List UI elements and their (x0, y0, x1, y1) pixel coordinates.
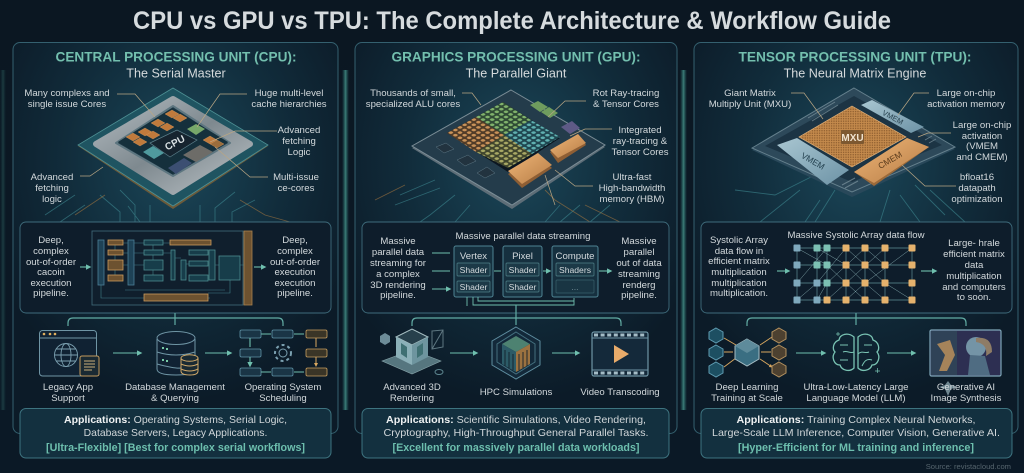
callout labels: memory (HBM) (599, 194, 665, 205)
source credit: Source: revistacloud.com (926, 462, 1011, 471)
callout labels: ray-tracing & (613, 136, 668, 147)
TPU chip illustration: MXU (841, 133, 864, 144)
shader stages: Shaders (559, 265, 591, 275)
callout labels: Huge multi-level (255, 88, 323, 99)
applications box: [Hyper-Efficient for ML training and inference] (738, 442, 974, 454)
icon: deep learning (709, 328, 786, 377)
pipeline right text (270, 235, 321, 299)
connector bracket (412, 305, 621, 326)
pipeline title: Massive parallel data streaming (456, 231, 590, 242)
shader stages: Shader (509, 282, 536, 292)
icon: database (157, 332, 198, 375)
icon labels: & Querying (151, 393, 199, 404)
pipeline right text (942, 238, 1006, 303)
pipeline left text: multiplication. (710, 288, 768, 299)
icon labels: Language Model (LLM) (806, 393, 906, 404)
callout labels: Giant Matrix (724, 88, 776, 99)
pipeline right text: execution (274, 278, 316, 289)
systolic array (794, 244, 916, 304)
callout labels: ce-cores (278, 183, 315, 194)
callout labels (709, 88, 1011, 205)
GPU subtitle: The Parallel Giant (466, 66, 567, 80)
circuit traces (45, 190, 290, 222)
pipeline left text: out-of-order (26, 257, 77, 268)
pipeline right text: to soon. (957, 292, 991, 303)
applications box (701, 408, 1012, 458)
callout labels: High-bandwidth (599, 183, 665, 194)
pipeline right text: Deep, (282, 235, 308, 246)
input arrows (432, 253, 450, 289)
callout labels: & Tensor Cores (593, 99, 659, 110)
applications box (362, 408, 669, 458)
shader stages: Shader (460, 282, 487, 292)
CPU pipeline panel (20, 222, 331, 313)
icon: 3D rendering (380, 329, 443, 374)
applications box: [Excellent for massively parallel data workloads] (392, 442, 640, 454)
icon labels: Legacy App (43, 382, 93, 393)
CPU chip illustration (78, 88, 268, 209)
pipeline left text: efficient matrix (708, 256, 770, 267)
icon labels: Scheduling (259, 393, 307, 404)
pipeline left text: parallel data (372, 247, 425, 258)
icon labels: Generative AI (937, 382, 995, 393)
callout labels: cache hierarchies (251, 99, 327, 110)
title: CPU vs GPU vs TPU: The Complete Architecture & Workflow Guide (133, 7, 891, 35)
pipeline left text: Systolic Array (710, 235, 768, 246)
callout labels: activation memory (927, 99, 1005, 110)
icon labels: HPC Simulations (480, 387, 552, 398)
arrow (552, 352, 579, 354)
shader stages: Vertex (460, 251, 487, 262)
callout labels: single issue Cores (28, 99, 106, 110)
CPU chip illustration: CPU (163, 134, 187, 153)
applications box (20, 408, 331, 458)
applications box: Applications: Training Complex Neural Networks, (736, 415, 976, 426)
callout labels: Multi-issue (273, 172, 319, 183)
callout labels: optimization (951, 194, 1003, 205)
applications box: [Ultra-Flexible] [Best for complex serial workflows] (46, 442, 305, 454)
connector bracket (747, 313, 966, 326)
callout labels: Tensor Cores (611, 147, 669, 158)
pipeline right text (616, 236, 662, 301)
icon labels: Ultra-Low-Latency Large (803, 382, 909, 393)
pipeline right text: pipeline. (277, 288, 313, 299)
GPU chip illustration (412, 90, 605, 209)
pipeline right text: pipeline. (621, 290, 657, 301)
callout labels (366, 88, 669, 205)
shader stages: Shader (460, 265, 487, 275)
icon labels: Database Management (125, 382, 225, 393)
callout labels: Advanced (31, 172, 73, 183)
callout labels: bfloat16 (960, 172, 994, 183)
TPU chip illustration (752, 88, 955, 197)
pipeline left text: Massive (380, 236, 416, 247)
TPU subtitle: The Neural Matrix Engine (784, 66, 926, 80)
pipeline right text: multiplication (946, 271, 1002, 282)
pipeline right text: efficient matrix (943, 249, 1005, 260)
callout labels: and CMEM) (956, 152, 1008, 163)
shader stages: ... (571, 282, 579, 292)
callout labels: datapath (958, 183, 996, 194)
panel: TPU (694, 42, 1018, 458)
array title: Massive Systolic Array data flow (787, 230, 925, 241)
icon: generative AI image (930, 330, 1001, 396)
pipeline right text: out-of-order (270, 257, 321, 268)
pipeline left text (26, 235, 77, 299)
pipeline right text: Massive (621, 236, 657, 247)
icon: video (592, 332, 648, 376)
pipeline right text: data (965, 260, 984, 271)
pipeline right text: Large- hrale (948, 238, 1000, 249)
arrow (921, 270, 936, 272)
callout labels: fetching (282, 136, 316, 147)
callout labels: Thousands of small, (370, 88, 456, 99)
icon labels: Deep Learning (716, 382, 778, 393)
pipeline diagram (92, 231, 252, 305)
TPU pipeline panel (701, 222, 1012, 313)
icon: HPC (492, 327, 540, 379)
pipeline right text: and computers (942, 282, 1006, 293)
pipeline left text: multiplication (711, 278, 767, 289)
GPU pipeline panel (362, 222, 669, 313)
arrow (113, 352, 141, 354)
arrow (777, 270, 789, 272)
shader stages: Shader (509, 265, 536, 275)
callout labels: logic (42, 194, 62, 205)
icon labels: Advanced 3D (383, 382, 441, 393)
pipeline left text (370, 236, 427, 301)
applications box: Applications: Operating Systems, Serial Logic, (64, 415, 287, 426)
arrow (205, 352, 231, 354)
pipeline left text: Deep, (38, 235, 64, 246)
panel: GPU (355, 42, 677, 458)
icon labels: Rendering (390, 393, 434, 404)
callout labels (24, 88, 327, 205)
pipeline right text: execution (274, 267, 316, 278)
icon labels: Image Synthesis (931, 393, 1002, 404)
GPU heading: GRAPHICS PROCESSING UNIT (GPU): (392, 50, 640, 64)
output arrow (599, 270, 611, 272)
applications box: Cryptography, High-Throughput General Parallel Tasks. (384, 428, 648, 439)
icon: brain (833, 332, 880, 373)
applications box: Large-Scale LLM Inference, Computer Vision, Generative AI. (712, 428, 1000, 439)
pipeline left text: cacoin (37, 267, 65, 278)
shader stages: Pixel (512, 251, 533, 262)
applications box: Applications: Scientific Simulations, Video Rendering, (386, 415, 646, 426)
TPU heading: TENSOR PROCESSING UNIT (TPU): (738, 50, 972, 64)
arrow (796, 352, 825, 354)
CPU heading: CENTRAL PROCESSING UNIT (CPU): (56, 50, 296, 64)
connector bracket (68, 313, 283, 326)
pipeline left text: data flow in (715, 246, 763, 257)
pipeline left text: execution (30, 278, 72, 289)
applications box: Database Servers, Legacy Applications. (84, 428, 267, 439)
arrow (254, 266, 265, 268)
pipeline left text (708, 235, 770, 299)
icon labels (711, 382, 1002, 404)
shader stages (454, 246, 598, 306)
pipeline right text: renderg (622, 280, 656, 291)
callout labels: Rot Ray-tracing (593, 88, 659, 99)
pipeline left text: pipeline. (380, 290, 416, 301)
arrow (887, 352, 915, 354)
TPU chip illustration: VMEM (881, 108, 905, 127)
pipeline left text: 3D rendering (370, 280, 426, 291)
callout labels: Many complexs and (24, 88, 110, 99)
pipeline left text: streaming for (370, 258, 427, 269)
callout labels: (VMEM (966, 141, 998, 152)
pipeline right text: parallel (624, 247, 654, 258)
pipeline right text: complex (277, 246, 313, 257)
callout labels: Integrated (618, 125, 662, 136)
TPU chip illustration: VMEM (799, 150, 827, 172)
pipeline right text: out of data (616, 258, 662, 269)
icon: OS scheduling (240, 330, 327, 376)
icon labels (43, 382, 321, 404)
pipeline left text: multiplication (711, 267, 767, 278)
callout labels: specialized ALU cores (366, 99, 460, 110)
icon labels: Support (51, 393, 85, 404)
pipeline left text: pipeline. (33, 288, 69, 299)
pipeline left text: complex (33, 246, 69, 257)
callout labels: Logic (288, 147, 311, 158)
arrow (80, 266, 90, 268)
callout labels: Large on-chip (953, 120, 1011, 131)
icon labels: Operating System (245, 382, 321, 393)
icon labels (383, 382, 660, 404)
callout labels: Large on-chip (937, 88, 995, 99)
shader stages: Compute (556, 251, 594, 262)
panel: CPU (13, 42, 338, 458)
pipeline left text: a complex (376, 269, 420, 280)
circuit traces (375, 180, 620, 222)
circuit traces (735, 175, 965, 222)
TPU chip illustration: CMEM (876, 149, 904, 171)
callout labels: Multiply Unit (MXU) (709, 99, 791, 110)
pipeline right text: streaming (618, 269, 660, 280)
icon labels: Training at Scale (711, 393, 783, 404)
callout labels: fetching (35, 183, 69, 194)
icon: legacy app (40, 330, 99, 376)
callout labels: Ultra-fast (613, 172, 652, 183)
callout labels: activation (962, 131, 1002, 142)
icon labels: Video Transcoding (580, 387, 660, 398)
callout labels: Advanced (278, 125, 320, 136)
arrow (450, 352, 477, 354)
CPU subtitle: The Serial Master (126, 66, 226, 80)
